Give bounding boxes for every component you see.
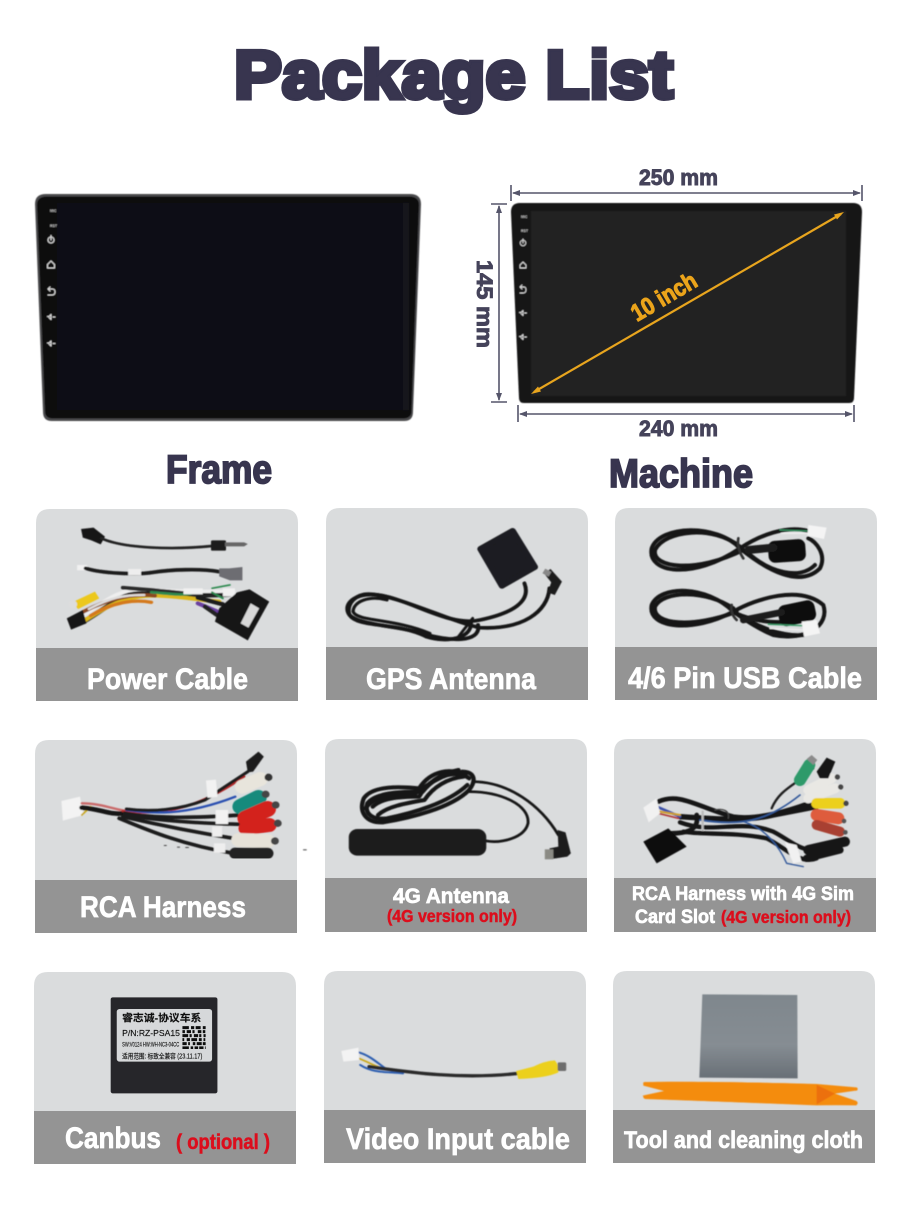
panel: power cable [36, 509, 298, 701]
label: rca harness with sim slot: RCA Harness with 4G Sim [632, 883, 854, 905]
icon: canbus box: P/N:RZ-PSA15 [122, 1029, 180, 1038]
icon: canbus box: 睿志诚-协议车系 [122, 1012, 201, 1025]
icon: power cable harness [67, 528, 269, 640]
note: 4g version only: (4G version only) [387, 906, 517, 926]
panel: canbus [34, 972, 296, 1164]
panel: tool and cleaning cloth [613, 971, 875, 1163]
icon: video cable [341, 1048, 566, 1079]
panel: video input cable [324, 971, 586, 1163]
icon: canbus box: 适用范围: 标致全兼容 (23.11.17) [122, 1052, 202, 1061]
panel: machine [472, 165, 862, 496]
dimension: 240 mm [518, 405, 854, 441]
dimension: 250 mm [511, 165, 862, 201]
diagonal arrow: 10 inch [531, 212, 844, 394]
icon: cloth and pry tool [643, 994, 857, 1105]
panel: 4g antenna [325, 739, 587, 932]
panel: rca harness [35, 740, 307, 933]
panel: frame [35, 194, 421, 492]
note: 4g version only: (4G version only) [721, 907, 851, 927]
dimension: 240 mm: 240 mm [639, 416, 718, 441]
label: power cable: Power Cable [87, 663, 248, 696]
icon: canbus box: SW:V0124 HW:WH-NC3-04CC [122, 1042, 179, 1049]
frame device: MIC [50, 209, 57, 213]
dimension: 145 mm [472, 204, 507, 402]
frame device: RST [50, 224, 58, 228]
dimension: 250 mm: 250 mm [639, 165, 718, 190]
note: optional: ( optional ) [176, 1131, 270, 1154]
icon: usb cables [651, 525, 827, 637]
title: Package List [234, 37, 673, 113]
icon: canbus box [111, 997, 217, 1093]
frame label: Frame [166, 448, 272, 492]
panel: usb cable [615, 508, 877, 700]
label: 4g antenna: 4G Antenna [393, 885, 509, 908]
panel: gps antenna [326, 508, 588, 700]
label: canbus: Canbus [65, 1122, 161, 1155]
label: card slot: Card Slot [635, 906, 715, 928]
frame device [35, 194, 421, 421]
label: tool and cleaning cloth: Tool and cleaning cloth [624, 1127, 863, 1154]
icon: rca harness with sim slot [643, 755, 849, 867]
icon: 4g antenna [349, 770, 571, 859]
label: usb cable: 4/6 Pin USB Cable [628, 662, 862, 695]
panel: rca harness with sim slot [614, 739, 876, 932]
icon: rca harness [61, 752, 307, 853]
diagonal arrow: 10 inch: 10 inch [626, 267, 702, 327]
machine device: MIC [521, 215, 528, 219]
label: video input cable: Video Input cable [346, 1123, 570, 1156]
dimension: 145 mm: 145 mm [472, 260, 497, 348]
machine label: Machine [609, 452, 753, 496]
label: gps antenna: GPS Antenna [366, 663, 536, 696]
label: rca harness: RCA Harness [80, 891, 246, 924]
icon: gps antenna [347, 531, 562, 640]
machine device [511, 203, 862, 403]
machine device: RST [521, 229, 529, 233]
